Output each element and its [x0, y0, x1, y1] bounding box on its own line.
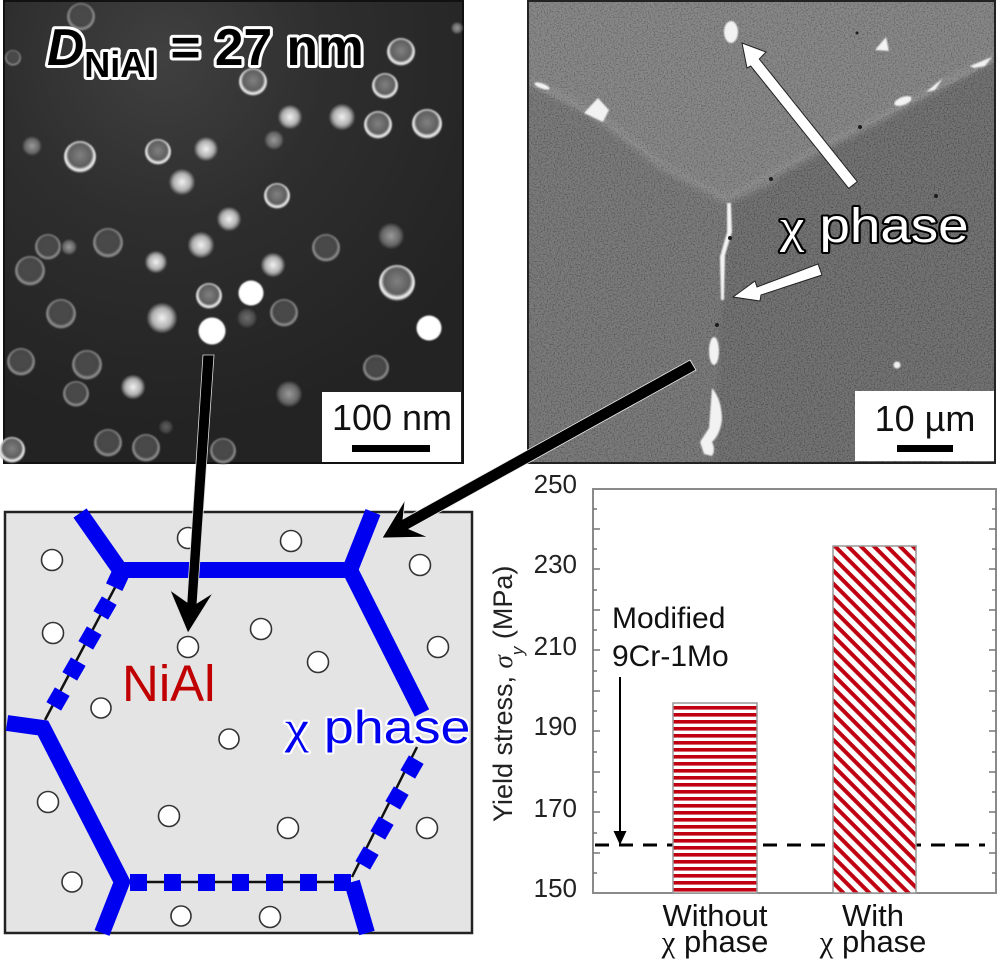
- precipitates: saturated white particles: [198, 280, 442, 344]
- title: particle diameter: = 27 nm: [156, 18, 364, 76]
- bright χ phase deposits: [534, 21, 992, 456]
- arrow: micrograph particle to schematic particle: [170, 355, 214, 633]
- y axis tick labels: 170: [534, 793, 577, 823]
- discrete χ phase particles: [46, 567, 424, 891]
- y axis tick labels: 150: [534, 873, 577, 903]
- grain boundary halos: [533, 57, 993, 200]
- y axis tick labels: 210: [534, 631, 577, 661]
- annotation: Modified 9Cr-1Mo: 9Cr-1Mo: [612, 640, 729, 673]
- bar: without χ phase: [673, 703, 757, 893]
- label: χ phase: χ phase: [779, 198, 969, 253]
- x label: without χ phase: Without: [662, 898, 768, 933]
- y axis tick labels: 250: [534, 469, 577, 499]
- panel: SEM micrograph of grain boundaries: [528, 1, 995, 463]
- annotation: Modified 9Cr-1Mo: [612, 602, 729, 673]
- bar: with χ phase: [833, 546, 929, 893]
- reference line: Modified 9Cr-1Mo: [595, 844, 985, 846]
- panel: TEM micrograph of NiAl precipitates: [0, 1, 463, 464]
- scale bar: 10 µm: 10 µm: [875, 398, 975, 439]
- title: particle diameter: D: [47, 18, 84, 76]
- arrow: grain boundary to schematic boundary: [382, 360, 696, 538]
- precipitates: ring-like dim particles: [5, 3, 389, 464]
- x label: without χ phase: [661, 898, 768, 959]
- y axis tick labels: [534, 469, 577, 903]
- precipitates: bright ring particles: [0, 38, 442, 463]
- x label: without χ phase: χ phase: [661, 924, 768, 959]
- thin grain boundaries: [45, 578, 417, 882]
- chart: yield stress bars: [488, 469, 996, 959]
- y axis title: y: [508, 645, 527, 656]
- x label: with χ phase: With: [842, 898, 904, 933]
- dark pores: [715, 32, 938, 327]
- NiAl particles: [38, 528, 448, 928]
- arrow: annotation to reference line: [614, 677, 626, 845]
- label: χ phase: χ phase: [284, 702, 470, 753]
- x label: with χ phase: χ phase: [819, 924, 926, 959]
- y axis tick labels: 190: [534, 711, 577, 741]
- plot frame: [593, 489, 996, 893]
- continuous χ phase films: [7, 512, 422, 933]
- panel: schematic microstructure: [5, 512, 472, 933]
- scale bar: 100 nm: [322, 392, 461, 462]
- y axis title: Yield stress, σ: [488, 655, 518, 822]
- label: NiAl: NiAl: [122, 655, 216, 712]
- annotation: Modified 9Cr-1Mo: Modified: [612, 602, 725, 635]
- precipitates: filled particles: [121, 104, 355, 399]
- scale bar: 10 µm: [855, 391, 994, 461]
- arrow: to upper χ phase: [742, 43, 857, 188]
- y axis title: (MPa): [488, 566, 518, 647]
- title: particle diameter: NiAl: [84, 44, 156, 85]
- scale bar: 100 nm: 100 nm: [332, 397, 452, 438]
- y axis tick labels: 230: [534, 549, 577, 579]
- x label: with χ phase: [819, 898, 926, 959]
- arrow: to central χ phase: [733, 264, 822, 301]
